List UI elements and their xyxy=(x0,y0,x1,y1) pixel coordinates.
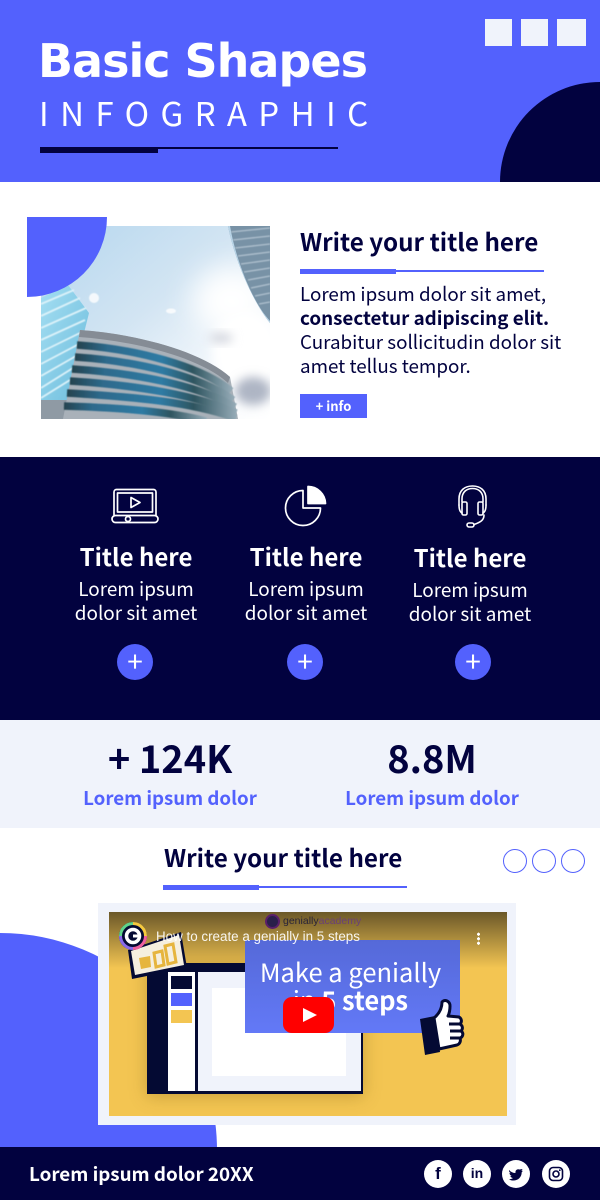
icon: headset xyxy=(458,485,487,528)
three outline circles xyxy=(503,849,585,873)
plus button 3: + xyxy=(465,641,481,681)
top shade xyxy=(109,912,507,968)
body text: Curabitur sollicitudin dolor sit xyxy=(300,328,561,355)
body text xyxy=(300,280,561,379)
body text: Lorem ipsum dolor sit amet, xyxy=(300,280,546,307)
video title: How to create a genially in 5 steps xyxy=(156,929,360,944)
footer panel xyxy=(0,1147,600,1200)
header panel xyxy=(0,0,600,182)
video frame xyxy=(98,903,516,1125)
three squares xyxy=(485,19,586,46)
channel name: geniallyacademy xyxy=(283,915,361,927)
stat label: Lorem ipsum dolor xyxy=(83,784,257,811)
quarter circle accent xyxy=(27,217,107,297)
title: Basic Shapes xyxy=(38,34,367,88)
stat label: Lorem ipsum dolor xyxy=(345,784,519,811)
body text: amet tellus tempor. xyxy=(300,352,471,379)
video thumbnail xyxy=(109,912,507,1116)
card text xyxy=(260,953,441,1018)
feature title: Title here xyxy=(80,538,192,573)
info button: + info xyxy=(316,396,351,415)
dark features panel xyxy=(0,457,600,720)
sidebar xyxy=(168,972,195,1091)
text block: title and body xyxy=(300,223,561,418)
body text: consectetur adipiscing elit. xyxy=(300,304,549,331)
plus button 3 xyxy=(455,644,491,680)
feature text: dolor sit amet xyxy=(75,599,197,626)
photo panel xyxy=(27,217,270,419)
lower blue shape xyxy=(0,933,217,1150)
plus button 2: + xyxy=(297,641,313,681)
info button xyxy=(300,394,367,418)
illustration: editor window xyxy=(147,963,363,1094)
feature title: Title here xyxy=(414,539,526,574)
card text: Make a genially xyxy=(260,953,441,990)
feature 1 xyxy=(75,538,197,626)
icon: facebook xyxy=(424,1160,452,1188)
feature title: Title here xyxy=(250,538,362,573)
feature text: Lorem ipsum xyxy=(248,575,364,602)
plus button 2 xyxy=(287,644,323,680)
stat value: + 124K xyxy=(108,729,232,784)
genially logo xyxy=(119,922,147,950)
feature 2 xyxy=(245,538,367,626)
icon: linkedin xyxy=(463,1160,491,1188)
stats panel xyxy=(0,720,600,828)
stat value: 8.8M xyxy=(387,729,477,784)
feature 3 xyxy=(409,539,531,627)
feature text xyxy=(409,576,531,627)
illustration: chart card xyxy=(128,932,186,979)
plus button 1 xyxy=(117,644,153,680)
blue title card xyxy=(245,940,460,1033)
heading: Write your title here xyxy=(164,839,402,874)
icon: pie chart xyxy=(284,486,326,526)
feature text: Lorem ipsum xyxy=(412,576,528,603)
menu dots xyxy=(477,932,480,945)
heading underline xyxy=(300,269,544,274)
stat 1 xyxy=(83,729,257,811)
corner quarter circle xyxy=(500,82,600,182)
feature text: Lorem ipsum xyxy=(78,575,194,602)
icon: twitter xyxy=(502,1160,530,1188)
stat 2 xyxy=(345,729,519,811)
small logo xyxy=(265,914,280,929)
feature text: dolor sit amet xyxy=(245,599,367,626)
channel mark xyxy=(265,914,362,929)
subtitle: INFOGRAPHIC xyxy=(39,88,380,136)
title underline xyxy=(40,147,338,153)
icon: laptop video xyxy=(111,488,159,524)
icon: linkedin: in xyxy=(471,1165,483,1181)
video section heading xyxy=(163,839,407,890)
plus button 1: + xyxy=(127,641,143,681)
card text: in 5 steps xyxy=(293,981,408,1018)
icon: facebook: f xyxy=(435,1164,441,1183)
heading: Write your title here xyxy=(300,223,538,258)
feature text xyxy=(75,575,197,626)
canvas xyxy=(198,972,361,1091)
footer text: Lorem ipsum dolor 20XX xyxy=(29,1160,254,1187)
feature text: dolor sit amet xyxy=(409,600,531,627)
icon: instagram xyxy=(542,1160,570,1188)
heading underline xyxy=(163,885,407,890)
youtube play button xyxy=(283,997,334,1033)
social icons xyxy=(424,1160,570,1188)
feature text xyxy=(245,575,367,626)
photo: buildings and sky xyxy=(41,226,270,419)
thumbs up xyxy=(420,999,464,1055)
